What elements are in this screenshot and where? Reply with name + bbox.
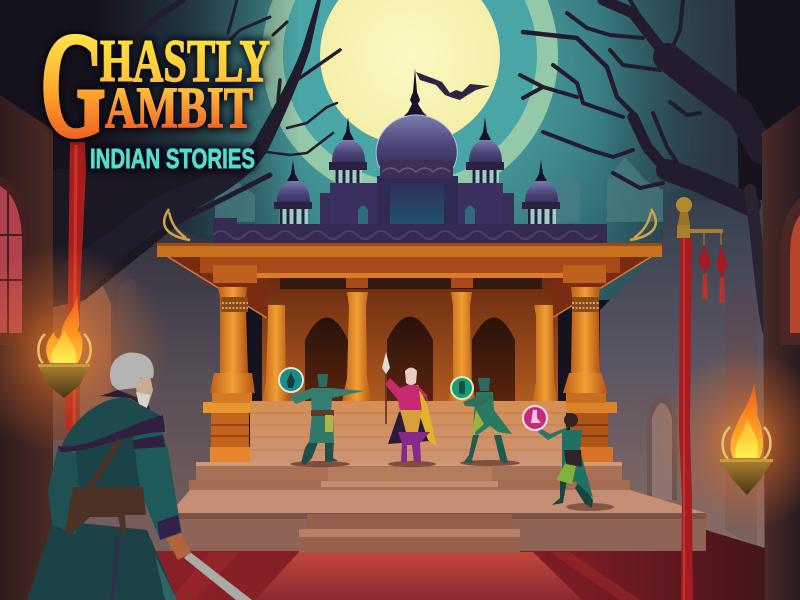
sword [184,552,252,600]
purple band [58,415,165,452]
roof finials [164,209,656,240]
coat skirt [27,520,177,600]
palace arched doors [358,206,475,224]
cuff and hand [157,515,181,540]
central dome [376,68,457,178]
roof underside [157,250,662,318]
belt [65,487,146,535]
right wall arch [725,284,757,547]
beam [200,257,620,273]
title shadow: INDIAN STORIES [90,144,255,175]
right small arch [647,395,677,500]
left leg and right leg [301,440,338,465]
right pole with lanterns [676,197,727,600]
title HASTLY: HASTLY [100,28,270,94]
bare trees [40,0,768,330]
title G: G [40,1,106,169]
cape [388,412,430,444]
orb: magenta [523,406,547,430]
right arm [133,425,182,540]
orb: teal [279,368,303,392]
back stairs [250,401,566,463]
lower platform [170,490,706,551]
left wall [53,222,232,600]
left wall arch [80,282,111,430]
title shadow: AMBIT [105,75,253,140]
title shadow [40,1,270,175]
title AMBIT: AMBIT [105,75,253,140]
figure: green warrior lower right [523,406,614,511]
title shadow: HASTLY [100,28,270,94]
red carpet floor [150,530,765,600]
foreground warrior [27,353,252,600]
hall ceiling shadow [280,278,542,289]
palace [274,68,560,225]
upper platform [196,463,622,491]
centre lower steps [307,514,512,530]
left tree [40,0,340,310]
sash [404,385,437,447]
bat [416,72,490,100]
carpet runner [255,552,582,600]
right torch [656,350,800,530]
side domes [274,160,560,224]
roof slab [157,243,662,257]
moon and halo [262,0,558,203]
left brown wall [0,95,53,600]
subtitle: INDIAN STORIES [90,143,255,174]
hood [62,398,165,448]
top [385,378,428,412]
small columns [262,278,558,402]
hall interior [262,278,558,402]
orb: green [451,377,473,399]
distant palace silhouettes [215,157,663,222]
torso [75,430,145,500]
dark sky edges [0,0,800,270]
centre upper step [321,481,498,500]
figure: central spear holder [382,352,437,467]
figure: green warrior right of centre [451,377,520,466]
left torch [0,245,169,455]
strap [88,440,120,490]
collar [100,390,150,410]
pavilion [157,209,662,462]
palace main block [320,176,514,225]
inner domes [329,117,504,183]
right brown wall [762,105,800,600]
title block [40,1,270,175]
left red banner [65,142,86,430]
title shadow: G [40,1,106,169]
night sky [0,0,800,300]
head [110,353,154,408]
large column right [561,265,617,462]
stage steps [170,401,706,553]
right window [780,198,800,345]
left window [0,176,31,345]
parapet [213,218,607,243]
large column left [203,265,260,462]
figure: green warrior with orb [279,368,364,467]
left arm [48,447,80,535]
right wall [600,200,770,552]
dark arches [305,316,515,402]
right tree [520,0,768,330]
